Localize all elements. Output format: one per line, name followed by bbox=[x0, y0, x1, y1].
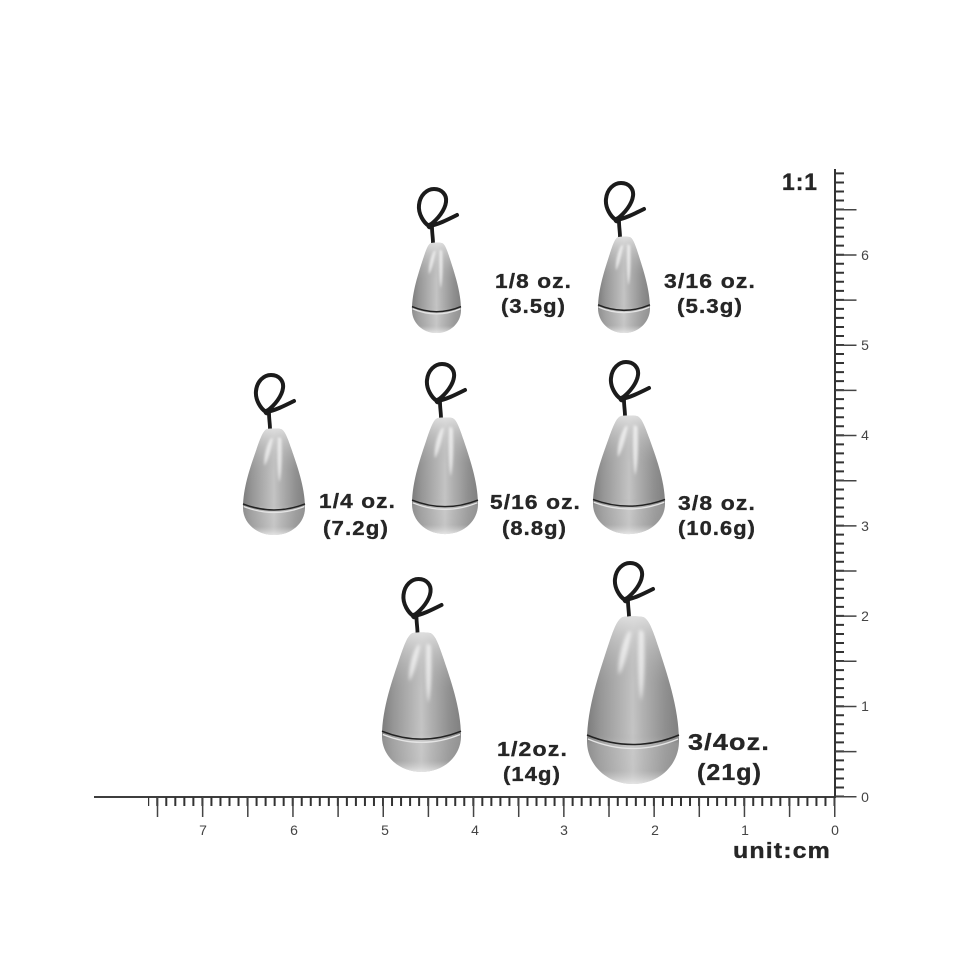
vertical ruler bbox=[835, 169, 869, 805]
sinker: 5/16 oz: 5/16 oz. bbox=[490, 492, 581, 514]
sinker: 1/4 oz: 1/4 oz. bbox=[319, 491, 396, 513]
sinker: 1/8 oz: 1/8 oz. bbox=[495, 271, 572, 293]
vertical ruler: 6 bbox=[861, 247, 869, 263]
vertical ruler: 1 bbox=[861, 698, 869, 714]
vertical ruler: 0 bbox=[861, 789, 869, 805]
sinker: 3/16 oz bbox=[598, 183, 756, 333]
sinker: 5/16 oz bbox=[412, 364, 581, 540]
sinker: 1/2 oz: (14g) bbox=[503, 764, 561, 786]
sinker: 1/4 oz: (7.2g) bbox=[323, 518, 389, 540]
sinker: 1/8 oz bbox=[412, 189, 572, 333]
vertical ruler: 2 bbox=[861, 608, 869, 624]
sinker: 3/8 oz: (10.6g) bbox=[678, 518, 756, 540]
sinker: 3/8 oz: 3/8 oz. bbox=[678, 493, 756, 515]
horizontal ruler: 4 bbox=[471, 822, 479, 838]
sinker: 3/4 oz: 3/4oz. bbox=[688, 729, 770, 755]
sinker: 3/16 oz: 3/16 oz. bbox=[664, 271, 756, 293]
horizontal ruler: 6 bbox=[290, 822, 298, 838]
unit label: unit:cm bbox=[733, 838, 831, 863]
vertical ruler: 4 bbox=[861, 427, 869, 443]
sinker: 3/4 oz bbox=[587, 563, 770, 785]
sinker: 1/2 oz bbox=[382, 579, 568, 786]
horizontal ruler bbox=[94, 797, 839, 838]
horizontal ruler: 3 bbox=[560, 822, 568, 838]
sinker: 1/2 oz: 1/2oz. bbox=[497, 739, 568, 761]
sinker: 3/8 oz bbox=[593, 362, 756, 540]
vertical ruler: 3 bbox=[861, 518, 869, 534]
sinker: 1/8 oz: (3.5g) bbox=[501, 296, 566, 318]
horizontal ruler: 1 bbox=[741, 822, 749, 838]
horizontal ruler: 5 bbox=[381, 822, 389, 838]
sinker: 1/4 oz bbox=[243, 375, 396, 540]
horizontal ruler: 0 bbox=[831, 822, 839, 838]
horizontal ruler: 7 bbox=[199, 822, 207, 838]
sinker: 3/4 oz: (21g) bbox=[697, 759, 762, 785]
vertical ruler: 5 bbox=[861, 337, 869, 353]
sinker: 3/16 oz: (5.3g) bbox=[677, 296, 743, 318]
scale label: 1:1 bbox=[782, 169, 818, 196]
sinker: 5/16 oz: (8.8g) bbox=[502, 518, 567, 540]
horizontal ruler: 2 bbox=[651, 822, 659, 838]
